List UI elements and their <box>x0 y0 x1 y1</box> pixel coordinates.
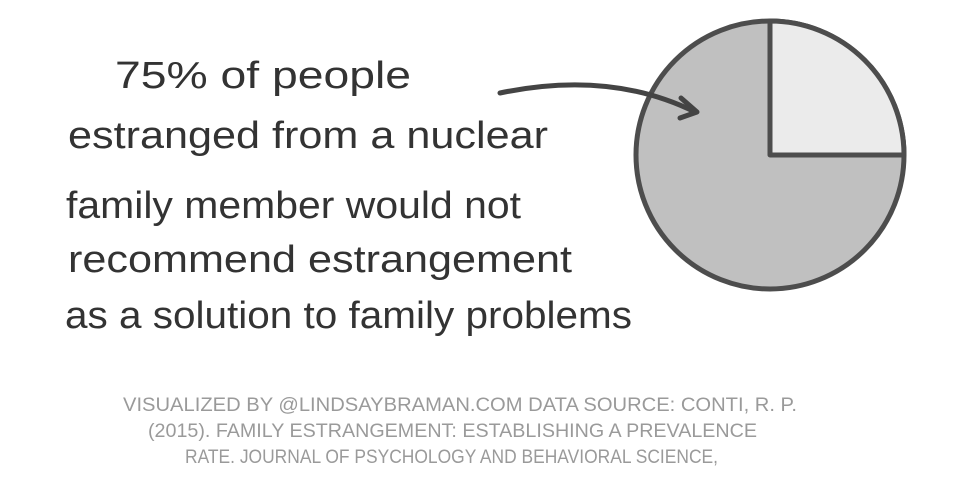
footer source text: (2015). FAMILY ESTRANGEMENT: ESTABLISHING A PREVALENCE <box>148 421 757 442</box>
footer source text: RATE. JOURNAL OF PSYCHOLOGY AND BEHAVIORAL SCIENCE, <box>185 447 718 468</box>
footer source text <box>123 395 797 468</box>
main statement text <box>65 55 632 337</box>
pie chart <box>636 21 904 289</box>
arrow <box>500 85 697 118</box>
main statement text: family member would not <box>66 185 521 227</box>
main statement text: as a solution to family problems <box>65 295 632 337</box>
footer source text: VISUALIZED BY @LINDSAYBRAMAN.COM DATA SOURCE: CONTI, R. P. <box>123 395 797 416</box>
main statement text: estranged from a nuclear <box>68 115 548 157</box>
main statement text: 75% of people <box>115 55 411 97</box>
main statement text: recommend estrangement <box>68 239 572 281</box>
